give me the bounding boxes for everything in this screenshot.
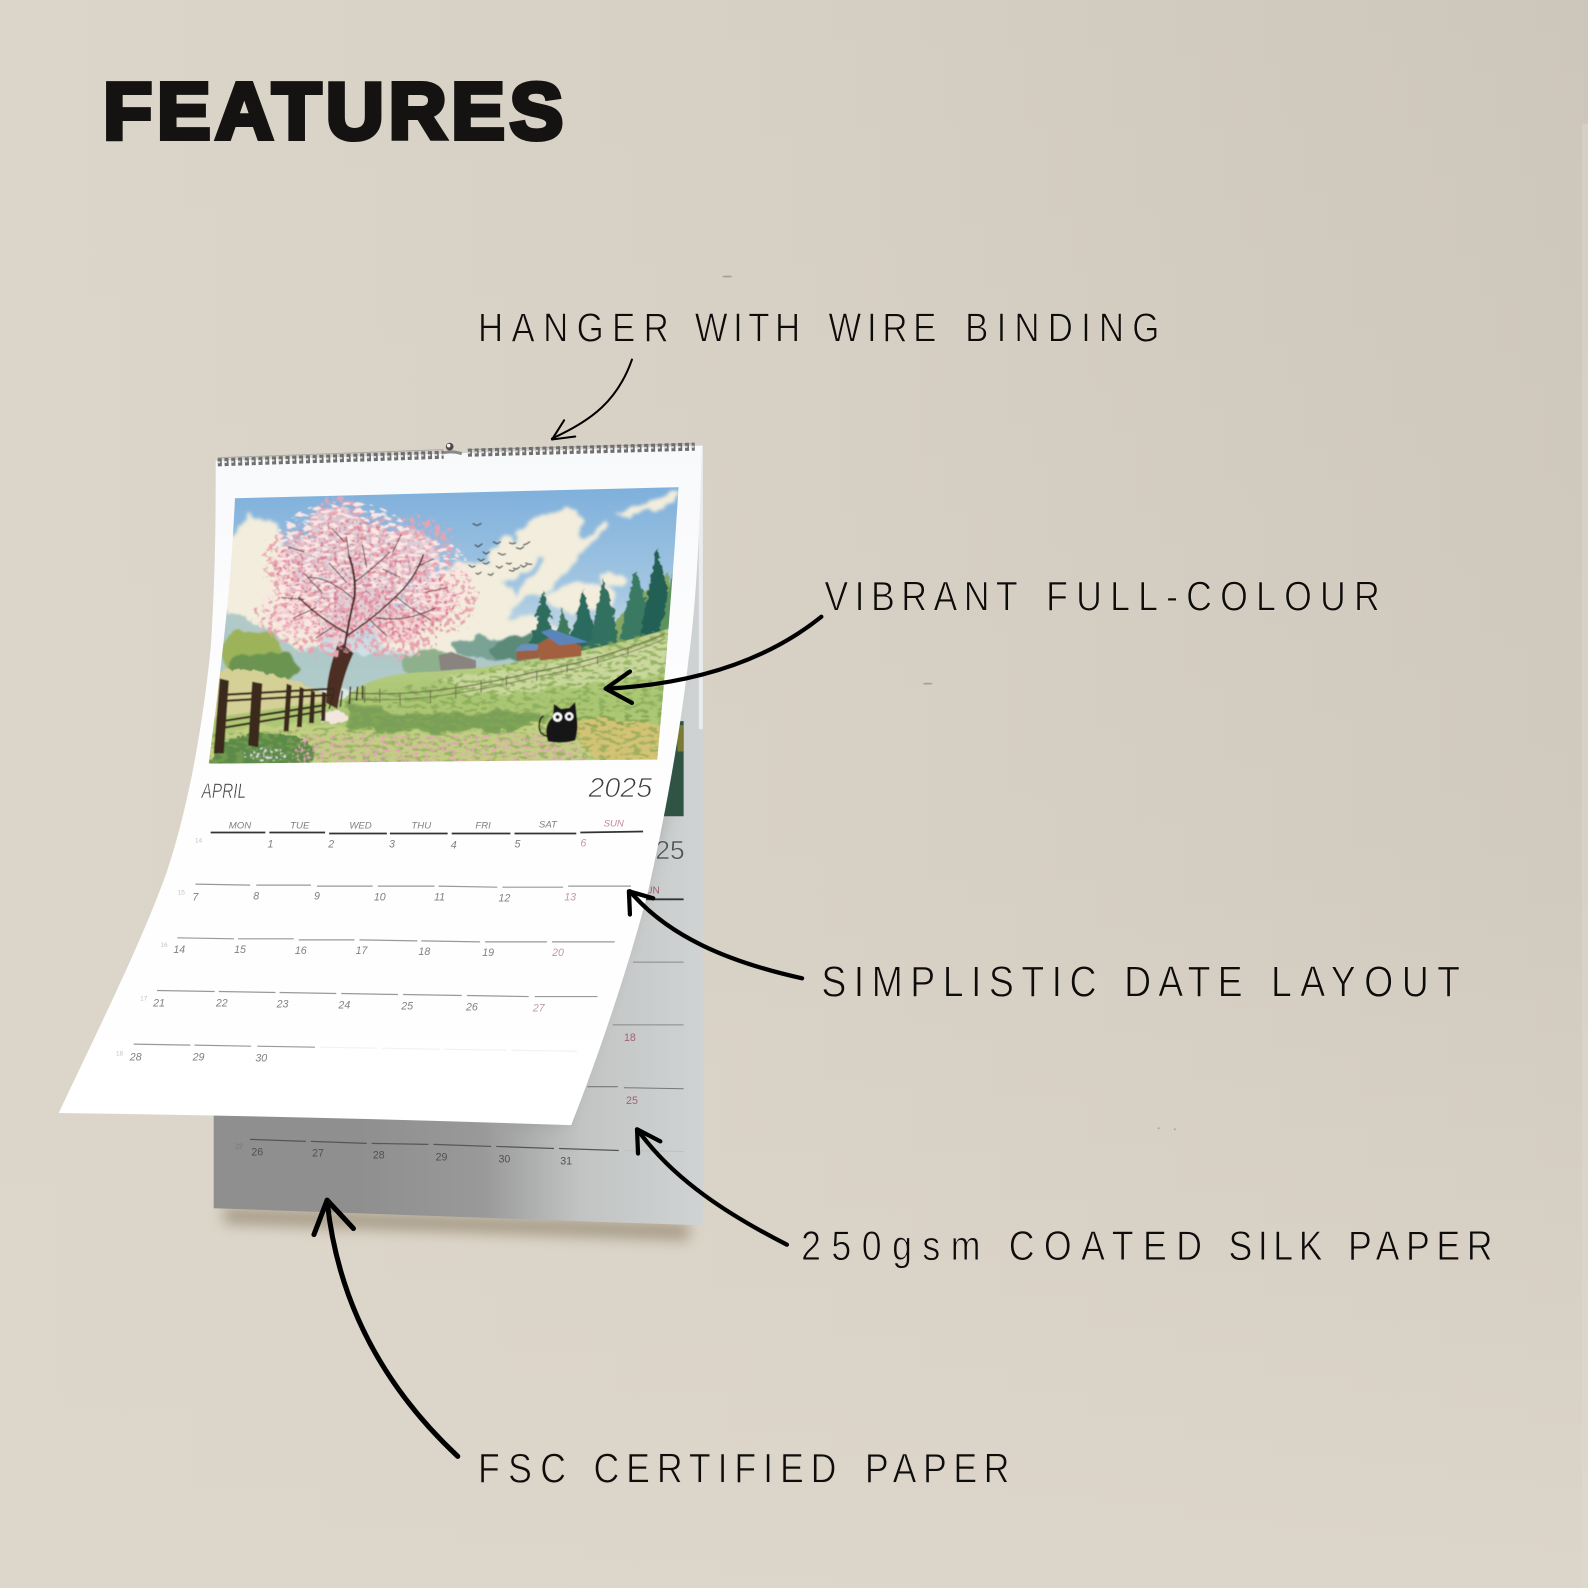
thin far fence — [349, 634, 664, 706]
wire binding — [218, 443, 695, 462]
label: silk paper: PAPER — [1348, 1223, 1493, 1270]
date numbers: 1 — [267, 839, 273, 851]
date numbers: 24 — [337, 1000, 350, 1012]
date numbers: 25 — [400, 1001, 413, 1013]
arrow: date layout — [629, 891, 802, 978]
date numbers: 16 — [295, 945, 307, 957]
date numbers: 5 — [515, 839, 521, 851]
date numbers: 13 — [564, 891, 576, 903]
artwork: spring landscape with cat — [203, 481, 689, 770]
date numbers: 11 — [434, 891, 445, 903]
back sheet dates — [235, 1032, 638, 1168]
branches — [282, 529, 448, 648]
label: hanger — [478, 306, 1159, 351]
meadow texture — [344, 626, 679, 734]
date numbers: 15 — [178, 889, 185, 896]
front sheet: April page — [59, 446, 702, 1125]
label: date layout — [821, 957, 1460, 1006]
wooden fence — [214, 634, 664, 753]
label: silk paper: COATED — [1009, 1223, 1202, 1270]
conifer forest — [528, 548, 673, 652]
back sheet dates: 25 — [626, 1095, 638, 1107]
back sheet dates: 28 — [373, 1150, 385, 1162]
label: full colour: FULL-COLOUR — [1046, 574, 1380, 620]
date numbers: 28 — [129, 1051, 142, 1063]
label: FSC paper — [478, 1446, 1009, 1492]
date numbers: 26 — [465, 1002, 478, 1014]
back sheet year: 2025 — [626, 835, 685, 865]
back sheet dates: 29 — [436, 1152, 448, 1164]
date numbers: 15 — [234, 944, 246, 956]
hanger hook — [444, 443, 462, 454]
label: hanger: WIRE — [828, 306, 936, 351]
flock of birds — [469, 524, 532, 575]
date numbers: 21 — [152, 998, 165, 1010]
back sheet dates: 31 — [560, 1156, 572, 1168]
back sheet dates: 26 — [251, 1147, 263, 1159]
date numbers: 20 — [551, 947, 564, 959]
title: FEATURES — [103, 67, 563, 156]
label: date layout: LAYOUT — [1271, 957, 1460, 1006]
date numbers: 17 — [140, 996, 148, 1003]
label: silk paper: 250gsm — [801, 1223, 981, 1270]
label: hanger: BINDING — [965, 306, 1159, 351]
weekday labels: SUN — [604, 818, 624, 829]
back sheet: March page — [214, 446, 703, 1225]
date numbers: 4 — [451, 840, 457, 852]
weekday labels: MON — [229, 820, 251, 831]
label: FSC paper: FSC — [478, 1446, 566, 1492]
date numbers: 30 — [255, 1052, 267, 1064]
bushes and far treeline — [221, 629, 552, 681]
label: FSC paper: PAPER — [865, 1446, 1009, 1492]
date grid lines — [134, 831, 643, 1051]
back sheet grid lines — [250, 899, 684, 1152]
weekday labels — [229, 818, 624, 831]
tree trunk — [326, 640, 353, 709]
clouds — [219, 491, 677, 658]
back sheet dates: 18 — [624, 1032, 636, 1044]
date numbers: 16 — [160, 942, 168, 949]
date numbers: 8 — [253, 890, 259, 902]
month heading: APRIL — [200, 779, 246, 803]
date numbers: 27 — [532, 1003, 546, 1015]
date numbers: 2 — [327, 839, 334, 851]
meadow shadow band — [344, 701, 547, 732]
distant hills — [220, 609, 574, 692]
arrow: FSC paper — [314, 1200, 458, 1456]
calendar drop shadow — [223, 1207, 689, 1240]
dirt path — [567, 721, 664, 762]
label: hanger: HANGER — [478, 306, 669, 351]
weekday labels: WED — [349, 820, 372, 831]
back sheet sunday label: SUN — [638, 885, 660, 896]
date numbers: 12 — [498, 892, 510, 904]
weekday labels: SAT — [539, 819, 558, 830]
date numbers: 6 — [580, 838, 586, 850]
date numbers: 10 — [374, 891, 386, 903]
arrow: silk paper — [637, 1129, 787, 1245]
date numbers: 3 — [389, 839, 395, 851]
date numbers: 23 — [276, 999, 289, 1011]
cherry tree — [257, 496, 478, 709]
date numbers: 9 — [314, 890, 320, 902]
back sheet dates: 22 — [235, 1142, 243, 1150]
foreground grass — [209, 720, 597, 764]
farmhouses — [439, 629, 588, 670]
date numbers: 22 — [215, 998, 228, 1010]
left hill — [214, 668, 327, 718]
label: date layout: SIMPLISTIC — [821, 957, 1097, 1006]
date numbers: 7 — [193, 891, 200, 903]
arrow: vibrant colour — [606, 617, 821, 703]
weekday labels: FRI — [475, 820, 491, 831]
date numbers: 19 — [482, 947, 494, 959]
label: full colour — [824, 574, 1380, 620]
year heading: 2025 — [587, 772, 653, 803]
date numbers: 14 — [173, 944, 185, 956]
date numbers: 18 — [116, 1050, 123, 1057]
back sheet dates: 30 — [498, 1154, 510, 1166]
pink flowers — [243, 709, 587, 763]
back sheet image strip — [653, 721, 684, 816]
date numbers — [116, 838, 586, 1064]
black cat — [539, 702, 578, 743]
dark near fence — [214, 679, 326, 753]
label: hanger: WITH — [695, 306, 800, 351]
back sheet dates: 27 — [312, 1148, 324, 1160]
label: full colour: VIBRANT — [824, 574, 1018, 620]
arrow: wire binding — [552, 360, 632, 440]
label: silk paper: SILK — [1228, 1223, 1323, 1270]
calendar mockup — [59, 443, 703, 1240]
date numbers: 17 — [356, 945, 369, 957]
weekday labels: TUE — [290, 820, 310, 831]
weekday labels: THU — [411, 820, 431, 831]
label: silk paper — [801, 1223, 1493, 1270]
label: date layout: DATE — [1124, 957, 1243, 1006]
blossom canopy — [257, 496, 478, 659]
label: FSC paper: CERTIFIED — [593, 1446, 836, 1492]
meadow — [212, 628, 668, 742]
date numbers: 18 — [418, 946, 430, 958]
date numbers: 29 — [192, 1051, 204, 1063]
date numbers: 14 — [195, 838, 202, 845]
